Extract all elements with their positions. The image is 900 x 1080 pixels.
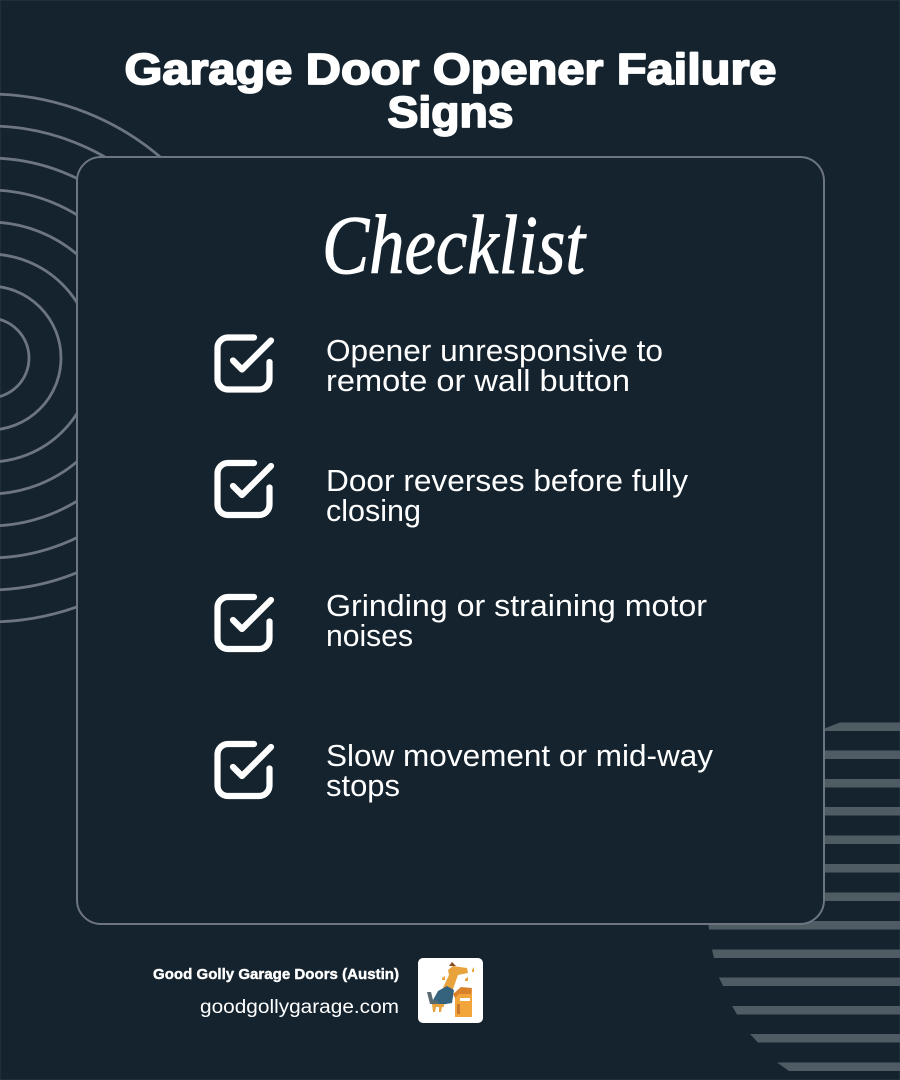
- icon: checkbox 4: [218, 744, 271, 796]
- item 1 text: [326, 334, 663, 398]
- item 4: [218, 739, 714, 803]
- item 1: [218, 334, 663, 398]
- item 3 text: [326, 589, 707, 653]
- title: Signs: [388, 88, 514, 137]
- panel: checklist: [77, 157, 824, 924]
- item 4 text: stops: [326, 769, 400, 803]
- item 1 text: remote or wall button: [326, 364, 630, 398]
- title: [124, 45, 777, 137]
- item 2 text: [326, 464, 689, 528]
- item 2 text: closing: [326, 494, 421, 528]
- item 4 text: [326, 739, 714, 803]
- item 4 text: Slow movement or mid-way: [326, 739, 714, 773]
- item 2 text: Door reverses before fully: [326, 464, 689, 498]
- footer company name: Good Golly Garage Doors (Austin): [153, 967, 399, 983]
- icon: checkbox 1: [218, 338, 271, 390]
- music notes: [442, 967, 474, 981]
- stool: [432, 1004, 444, 1012]
- giraffe tail: [427, 992, 438, 1004]
- icon: checkbox 2: [218, 463, 271, 515]
- item 2: [218, 463, 689, 528]
- icon: checkbox 3: [218, 597, 271, 649]
- item 1 text: Opener unresponsive to: [326, 334, 663, 368]
- footer website: goodgollygarage.com: [200, 997, 399, 1018]
- decorative stripes: [708, 722, 900, 1071]
- title: Garage Door Opener Failure: [124, 45, 777, 94]
- garage box: [455, 989, 472, 1017]
- item 3 text: Grinding or straining motor: [326, 589, 707, 623]
- item 3 text: noises: [326, 619, 413, 653]
- item 3: [218, 589, 707, 653]
- checklist heading: Checklist: [322, 199, 587, 292]
- decorative concentric arcs: [0, 94, 253, 622]
- logo: [418, 958, 483, 1023]
- giraffe body in blue suit: [433, 986, 454, 1005]
- giraffe neck and head: [441, 966, 468, 992]
